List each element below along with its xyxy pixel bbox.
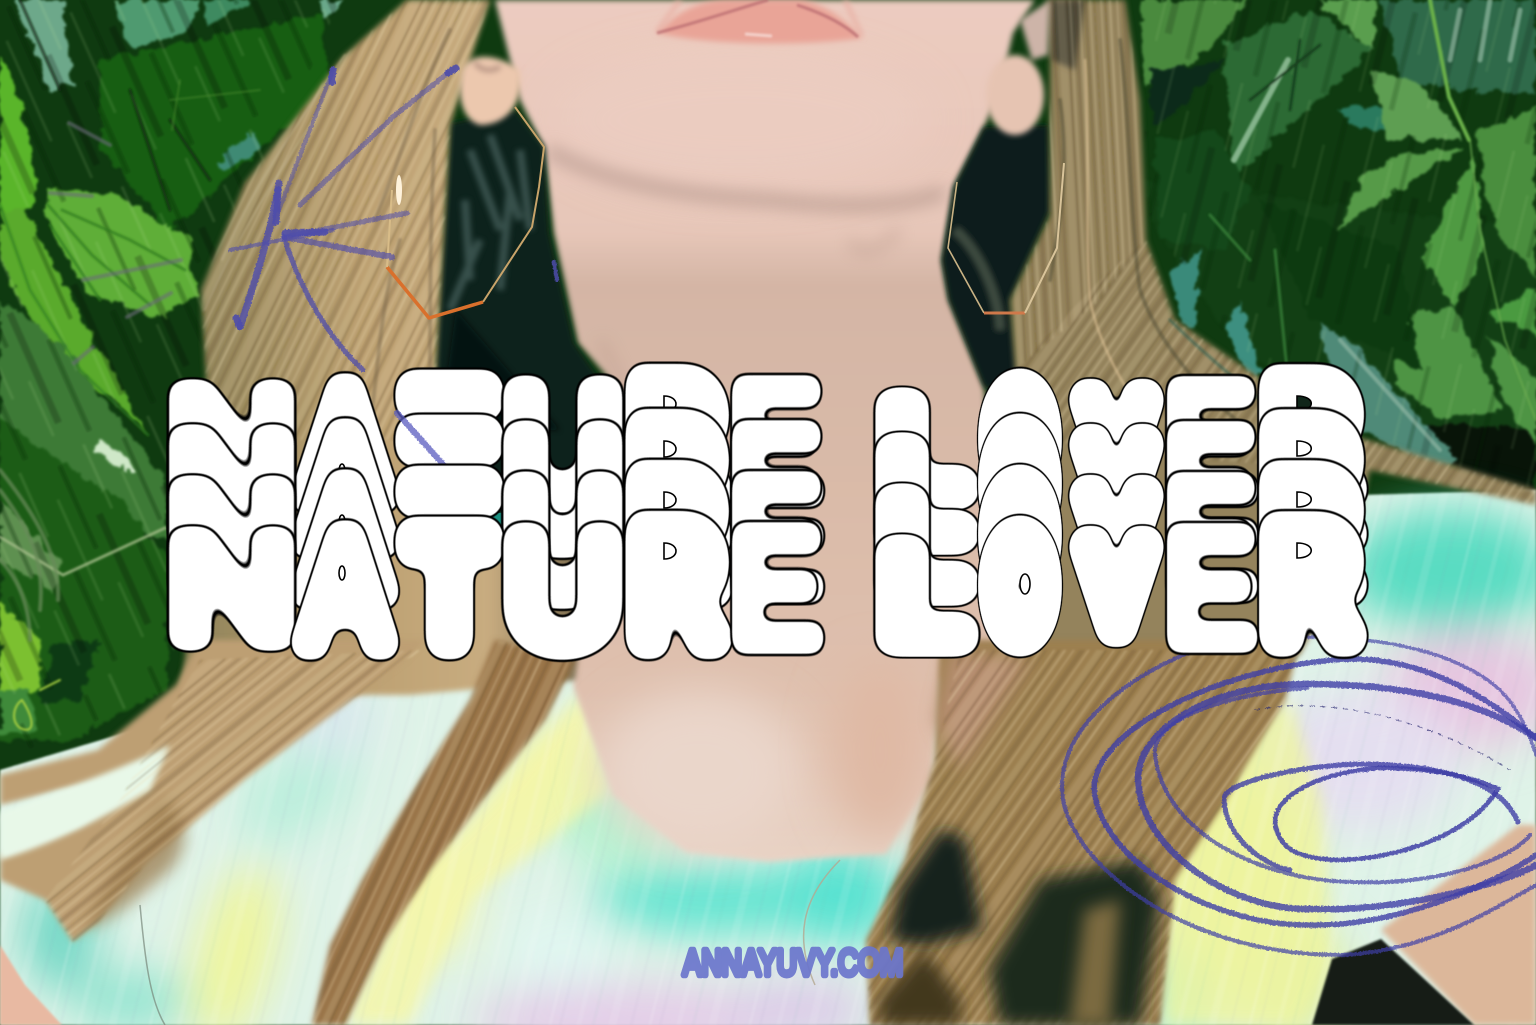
title echo layer 2: U bbox=[506, 402, 619, 574]
title echo layer 1: A bbox=[304, 357, 386, 529]
foliage: left streak texture bbox=[0, 0, 340, 760]
hair: lower right bbox=[804, 640, 1300, 1025]
jaw and neck shading bbox=[548, 150, 944, 205]
title front layer: R bbox=[1266, 500, 1356, 669]
shirt yellow band right of strand bbox=[345, 690, 612, 1025]
title echo layer 3 bbox=[169, 446, 1356, 629]
title echo layer 2: T bbox=[410, 404, 489, 569]
shirt tie-dye colour washes bbox=[22, 510, 1536, 1025]
arm skin: lower right bbox=[1381, 825, 1536, 1025]
hair wisps: upper right bbox=[1050, 40, 1310, 450]
title echo layer 3: T bbox=[410, 455, 489, 620]
title echo layer 1: N bbox=[169, 360, 294, 524]
title front layer: L bbox=[884, 525, 963, 666]
shirt strands texture bbox=[0, 490, 1536, 1025]
title echo layer 2: R bbox=[632, 397, 721, 569]
title front layer: V bbox=[1086, 524, 1148, 651]
hair strand texture: upper right bbox=[1010, 0, 1146, 370]
title front layer: O bbox=[990, 517, 1050, 657]
title front layer: E bbox=[1164, 498, 1255, 677]
title echo layer 2: L bbox=[884, 423, 963, 564]
ears bbox=[460, 0, 1050, 135]
dark gap: lower right bbox=[1312, 939, 1474, 1025]
shirt fold line bbox=[140, 905, 165, 1025]
hair strand texture: upper left bbox=[200, 0, 490, 440]
title echo layer 3: N bbox=[169, 456, 294, 620]
title echo layer 3: O bbox=[990, 466, 1050, 606]
title echo layer 1: U bbox=[506, 357, 619, 529]
title echo layer 1: R bbox=[1266, 353, 1356, 522]
hair strand texture: lower right bbox=[866, 650, 1300, 1025]
title echo layer 2: V bbox=[1086, 422, 1148, 549]
foliage: right streak texture bbox=[1135, 0, 1536, 500]
title echo layer 3: U bbox=[506, 453, 619, 625]
dark hair behind neck: left bbox=[436, 110, 610, 548]
title echo layer 3: R bbox=[1266, 449, 1356, 618]
title echo layer 1: E bbox=[1164, 351, 1255, 530]
shirt base bbox=[0, 490, 1536, 1025]
title echo layer 3: E bbox=[1164, 447, 1255, 626]
hair strand: centre bbox=[312, 640, 575, 1025]
title echo layer 2: A bbox=[304, 402, 386, 574]
title: NATURE LOVER bubble layers bbox=[169, 350, 1356, 680]
title echo layer 2 bbox=[169, 395, 1356, 578]
thin hair flyaway bbox=[804, 860, 840, 985]
title echo layer 2: E bbox=[1164, 396, 1255, 575]
title front layer bbox=[169, 497, 1356, 680]
title echo layer 1: L bbox=[884, 378, 963, 519]
title echo layer 2: R bbox=[1266, 398, 1356, 567]
title echo layer 1: T bbox=[410, 359, 489, 524]
hair strand texture: centre bbox=[312, 640, 575, 1025]
lips bbox=[657, 0, 862, 43]
earring: left bbox=[387, 107, 544, 318]
title echo layer 2: E bbox=[729, 395, 821, 578]
title echo layer 3: L bbox=[884, 474, 963, 615]
hair wisps: upper left bbox=[205, 30, 450, 410]
title front layer: R bbox=[632, 499, 721, 671]
title front layer: T bbox=[410, 506, 489, 671]
neck and chest skin bbox=[495, 0, 1035, 862]
title echo layer 3: A bbox=[304, 453, 386, 625]
title echo layer 2: N bbox=[169, 405, 294, 569]
title echo layer 2: O bbox=[990, 415, 1050, 555]
title echo layer 1 bbox=[169, 350, 1356, 533]
title front layer: U bbox=[506, 504, 619, 676]
title front layer: N bbox=[169, 507, 294, 671]
title echo layer 1: E bbox=[729, 350, 821, 533]
title front layer: A bbox=[304, 504, 386, 676]
title echo layer 1: O bbox=[990, 370, 1050, 510]
foliage: left bbox=[0, 0, 345, 740]
title echo layer 3: V bbox=[1086, 473, 1148, 600]
hair: upper left bbox=[180, 0, 590, 695]
scribble: blue star bbox=[230, 68, 557, 370]
earring: right bbox=[948, 163, 1064, 313]
title echo layer 3: R bbox=[632, 448, 721, 620]
title echo layer 1: V bbox=[1086, 377, 1148, 504]
title front layer: E bbox=[729, 497, 821, 680]
dark hair patches bbox=[890, 830, 982, 945]
foliage: right details bbox=[1210, 0, 1536, 450]
title echo layer 1: R bbox=[632, 352, 721, 524]
title echo layer 3: E bbox=[729, 446, 821, 629]
foliage: right bbox=[1140, 0, 1536, 510]
hair: lower left sweep bbox=[0, 640, 575, 1025]
arm skin: lower left bbox=[0, 945, 62, 1025]
dark hair behind neck: right bbox=[942, 125, 1050, 400]
scribble: blue spiral bbox=[1062, 637, 1536, 955]
hair strand texture: sweep bbox=[45, 650, 425, 942]
hair: upper right bbox=[1000, 0, 1536, 660]
scribble crossing the title bbox=[397, 413, 451, 473]
website credit: ANNAYUVY.COM bbox=[683, 942, 903, 983]
foliage: left details bbox=[0, 0, 260, 730]
